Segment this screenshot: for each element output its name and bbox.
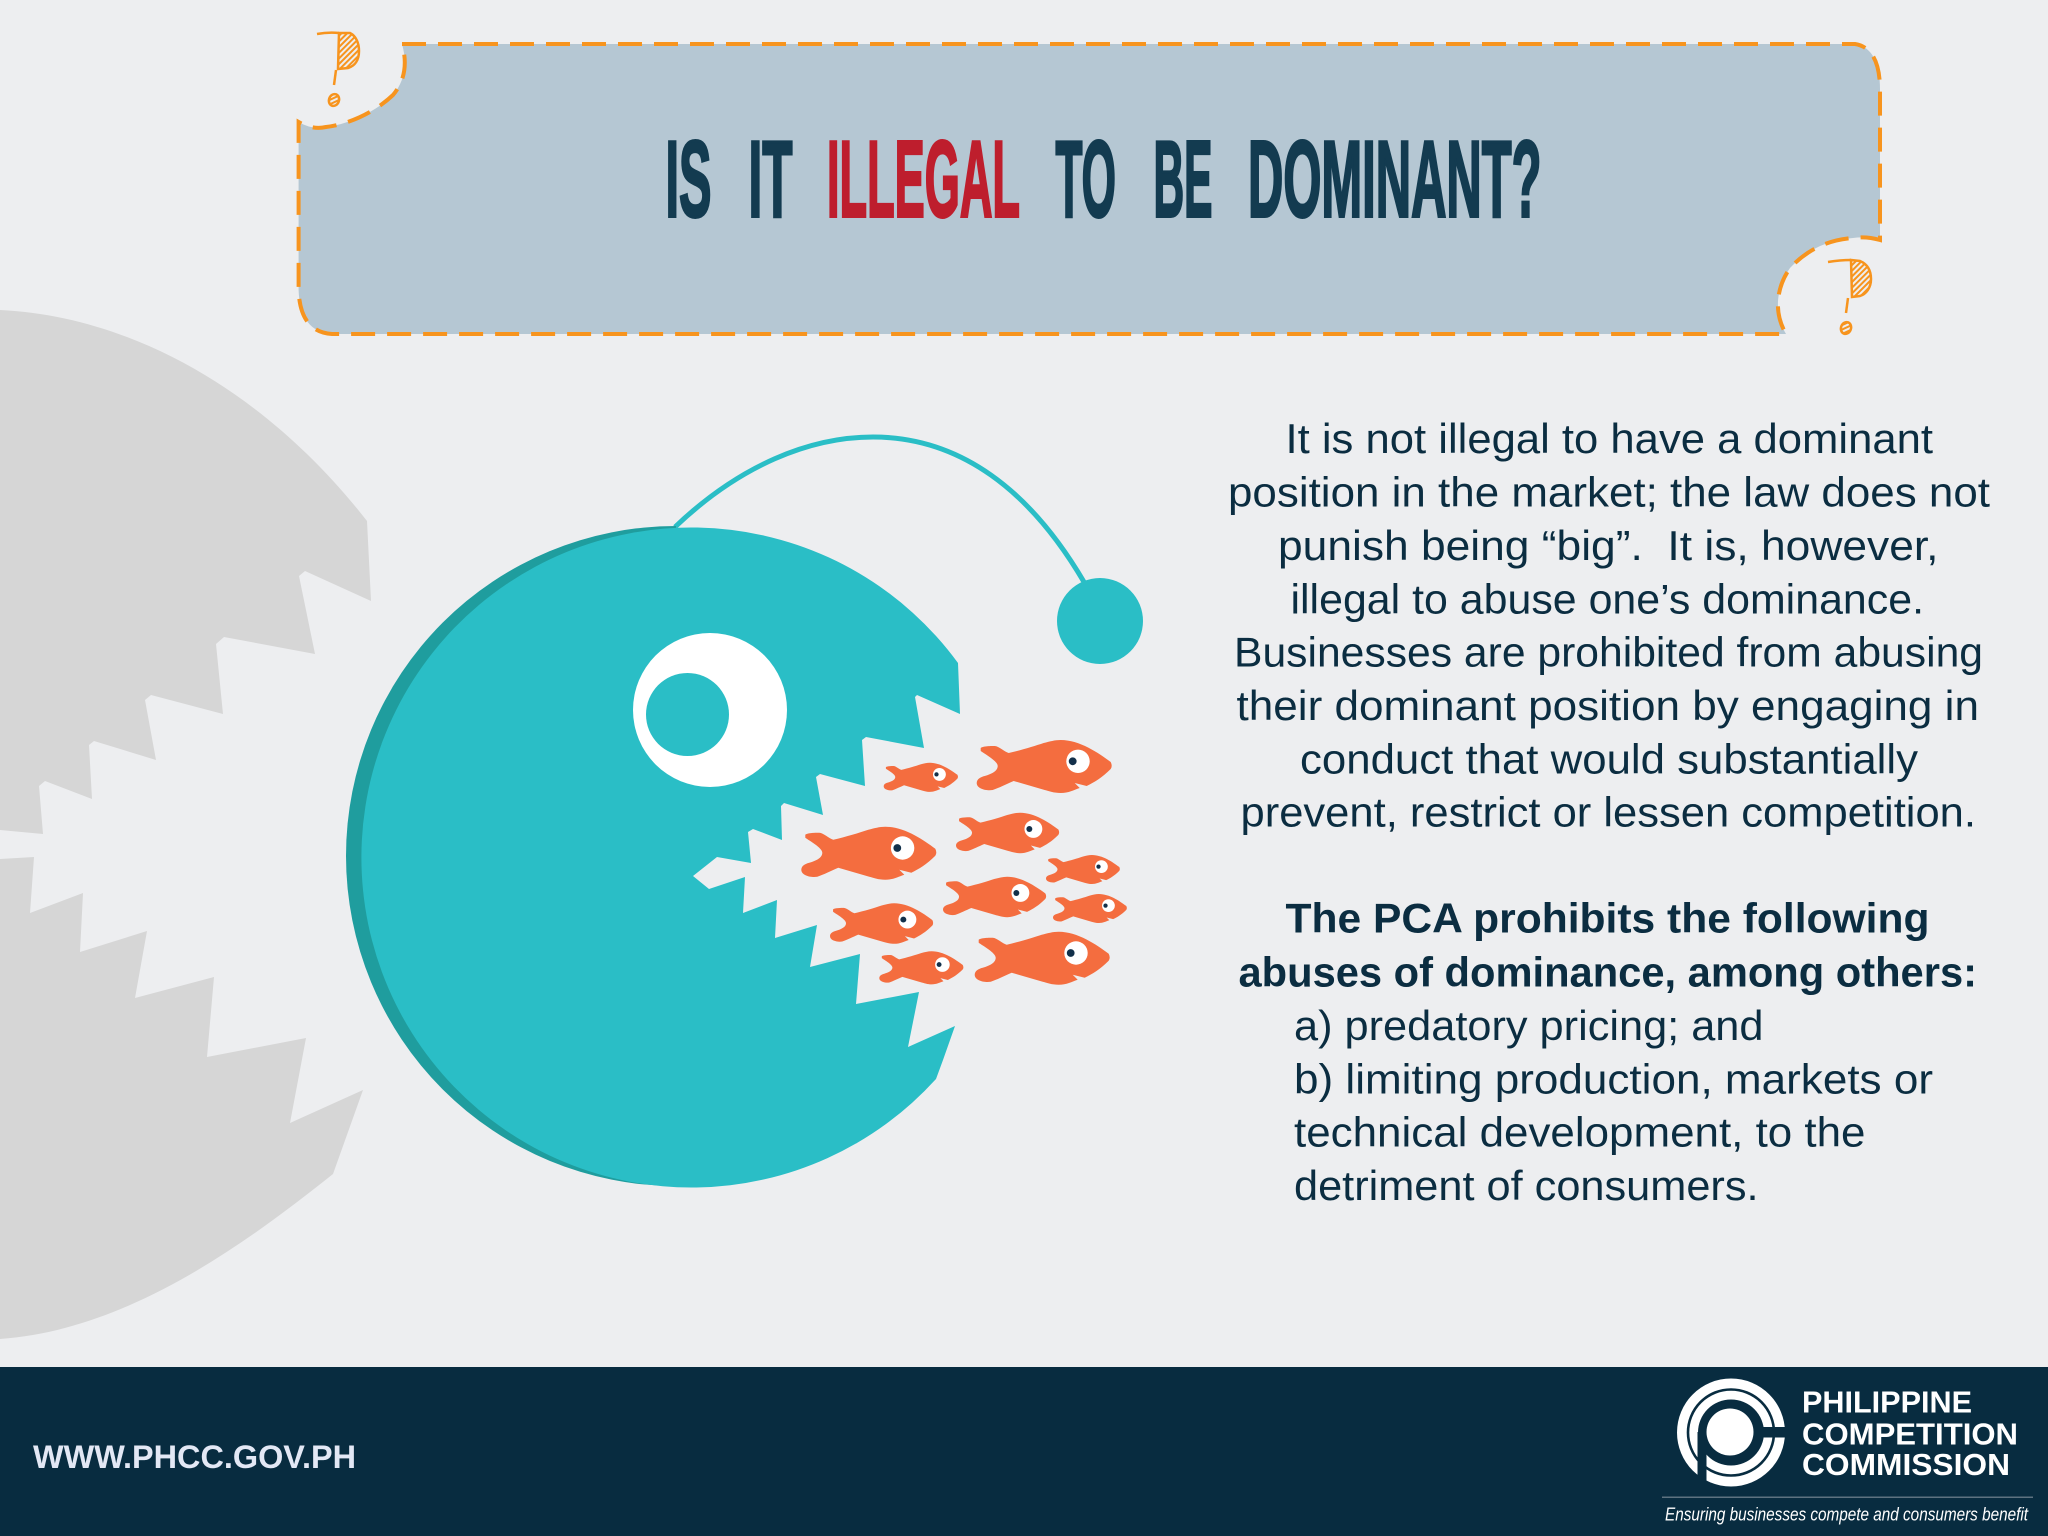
icon: PCC logo mark [1677, 1378, 1788, 1488]
title banner [299, 44, 1880, 334]
explanatory paragraph: position in the market; the law does not [1228, 468, 1990, 516]
anglerfish eye [633, 633, 787, 787]
big grey predator jaws [0, 310, 371, 1339]
icon: question mark bottom right [1828, 260, 1871, 335]
logo wordmark [1802, 1386, 2018, 1482]
explanatory paragraph: their dominant position by engaging in [1236, 682, 1979, 729]
title banner: DOMINANT? [1248, 118, 1542, 240]
anglerfish body shadow [346, 526, 676, 1186]
fish 10 [1053, 894, 1127, 923]
fish 6 [943, 877, 1046, 917]
title text: IT [748, 118, 792, 240]
prohibited abuses heading: abuses of dominance, among others: [1238, 948, 1977, 995]
fish 9 [1046, 855, 1120, 884]
explanatory paragraph: Businesses are prohibited from abusing [1234, 629, 1983, 676]
title text: IS [666, 118, 712, 240]
fish 1 [977, 740, 1112, 793]
footer band [0, 1367, 2048, 1536]
grey upper jaw [0, 310, 371, 834]
list of abuses [1294, 1002, 1933, 1209]
logo wordmark: COMMISSION [1802, 1448, 2010, 1482]
explanatory paragraph [1228, 415, 1990, 836]
footer website url: WWW.PHCC.GOV.PH [33, 1439, 356, 1475]
logo wordmark: COMPETITION [1802, 1418, 2018, 1452]
fish 4 [884, 763, 958, 792]
banner panel with dashed border [299, 44, 1880, 334]
fish 7 [830, 903, 933, 944]
title text: TO [1056, 118, 1116, 240]
explanatory paragraph: punish being “big”. It is, however, [1278, 522, 1938, 569]
list of abuses: b) limiting production, markets or [1294, 1055, 1933, 1102]
fish 3 [801, 827, 936, 880]
title text [666, 118, 1542, 240]
anglerfish lure line [675, 437, 1084, 582]
logo wordmark: PHILIPPINE [1802, 1386, 1972, 1420]
prohibited abuses heading [1238, 894, 1977, 995]
school of small orange fish [801, 740, 1127, 985]
fish 8 [879, 951, 963, 984]
explanatory paragraph: It is not illegal to have a dominant [1286, 415, 1933, 462]
anglerfish lure ball [1057, 578, 1143, 664]
prohibited abuses heading: The PCA prohibits the following [1286, 894, 1930, 942]
explanatory paragraph: illegal to abuse one’s dominance. [1290, 575, 1924, 622]
title text: BE [1154, 118, 1212, 240]
list of abuses: detriment of consumers. [1294, 1162, 1758, 1209]
title text: ILLEGAL [827, 118, 1020, 240]
list of abuses: technical development, to the [1294, 1109, 1866, 1156]
list of abuses: a) predatory pricing; and [1294, 1002, 1764, 1049]
fish 2 [975, 932, 1110, 985]
icon: question mark top left [317, 33, 359, 107]
anglerfish body with toothed mouth [361, 527, 960, 1187]
grey lower jaw [0, 857, 363, 1339]
explanatory paragraph: conduct that would substantially [1300, 735, 1918, 782]
explanatory paragraph: prevent, restrict or lessen competition. [1240, 789, 1976, 836]
fish 5 [956, 813, 1059, 853]
anglerfish illustration [346, 437, 1143, 1187]
